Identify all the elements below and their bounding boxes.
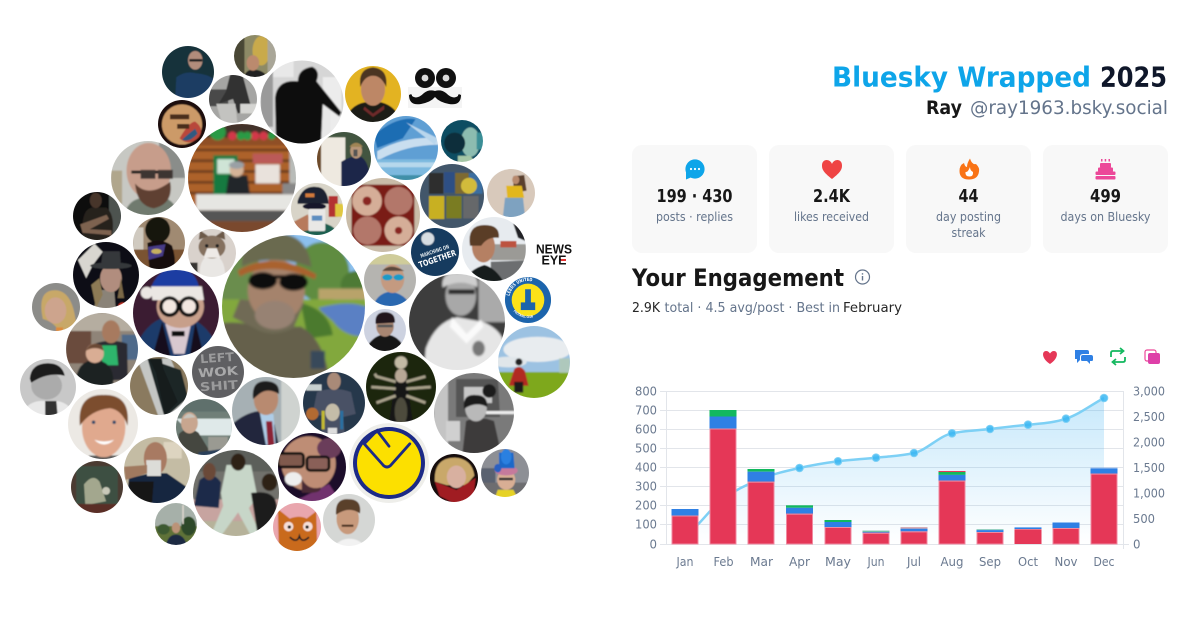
title: 2025 bbox=[1100, 60, 1167, 94]
avatar: blue sky bbox=[374, 116, 438, 180]
right axis: 500 bbox=[1133, 512, 1155, 526]
engagement summary bbox=[632, 300, 902, 316]
bar: Oct bbox=[1014, 527, 1042, 544]
avatar: woman in yellow top bbox=[487, 169, 535, 217]
avatar: small man in beanie bbox=[360, 305, 410, 355]
bar: Feb bbox=[710, 410, 736, 544]
avatar: main selfie with cap and sunglasses bbox=[222, 235, 365, 378]
month labels: Sep bbox=[979, 555, 1001, 569]
month labels bbox=[676, 555, 1114, 569]
avatar: lego log cabin bbox=[188, 124, 296, 232]
month labels: Mar bbox=[750, 555, 773, 569]
icon: replies bbox=[1075, 350, 1093, 364]
month labels: Apr bbox=[789, 555, 810, 569]
stacked bars bbox=[672, 410, 1118, 544]
avatar: tattooed man in dark bbox=[73, 192, 121, 240]
logo: News Eye: EYE bbox=[542, 254, 566, 268]
left axis: 700 bbox=[635, 404, 657, 418]
stat card: days on Bluesky: 499 bbox=[1090, 186, 1121, 207]
avatar: teal portrait bbox=[441, 120, 483, 162]
avatar: Marching On Together: MARCHING ON bbox=[420, 244, 450, 260]
avatar: Leeds United badge bbox=[504, 277, 551, 323]
avatar: smiling man bbox=[68, 389, 138, 459]
avatar cluster bbox=[20, 35, 572, 551]
avatar: man drinking from mug bbox=[124, 437, 190, 503]
avatar: tabby cat bbox=[188, 229, 236, 277]
right axis bbox=[1133, 384, 1165, 552]
avatar: zine posters bbox=[420, 164, 484, 228]
left axis: 300 bbox=[635, 480, 657, 494]
avatar: woman in red scarf bbox=[425, 449, 483, 507]
stat card: posts and replies: posts · replies bbox=[656, 210, 733, 224]
month labels: Jul bbox=[906, 555, 921, 569]
right axis: 3,000 bbox=[1133, 384, 1165, 398]
avatar: suit and tie bbox=[130, 357, 188, 415]
month labels: Jun bbox=[867, 555, 884, 569]
icon: likes bbox=[1043, 351, 1057, 364]
avatar: Left Wok Shit shirt bbox=[192, 346, 244, 398]
avatar: Left Wok Shit shirt: SHIT bbox=[200, 378, 239, 394]
stat card: day posting streak: 44 bbox=[958, 186, 978, 207]
stat card: day posting streak: streak bbox=[952, 226, 986, 240]
avatar: man with glasses, purple light bbox=[278, 433, 346, 501]
user name and handle: Ray bbox=[926, 97, 963, 119]
month labels: May bbox=[825, 555, 851, 569]
engagement summary: total · 4.5 avg/post · Best in bbox=[664, 300, 840, 316]
avatar: black silhouette at door bbox=[260, 60, 344, 144]
avatar: man in suit bbox=[232, 377, 300, 445]
bar: May bbox=[824, 520, 852, 544]
bar: Apr bbox=[786, 505, 813, 544]
right axis: 2,000 bbox=[1133, 436, 1165, 450]
avatar: records and moustache bbox=[408, 68, 462, 108]
left axis: 200 bbox=[635, 498, 657, 512]
avatar: santa hat and glasses bbox=[133, 270, 219, 356]
engagement summary: 2.9K bbox=[632, 300, 661, 316]
bar: Nov bbox=[1052, 522, 1080, 544]
avatar: runner with child bbox=[66, 313, 138, 385]
bar: Dec bbox=[1090, 468, 1118, 544]
avatar: red linocut print bbox=[346, 178, 420, 252]
avatar: Leeds United badge: LEEDS UNITED bbox=[506, 278, 532, 296]
cumulative area and line bbox=[685, 394, 1108, 544]
stat card: day posting streak bbox=[906, 145, 1031, 253]
avatar: cartoon orange cat bbox=[273, 503, 321, 551]
avatar: many-armed goddess bbox=[359, 345, 443, 429]
avatar: man in navy jacket bbox=[162, 46, 214, 98]
avatar: Leeds smiley badge bbox=[349, 423, 429, 503]
avatar: man with mug and cap bbox=[291, 183, 343, 235]
user name and handle: @ray1963.bsky.social bbox=[970, 97, 1168, 119]
stat card: days on Bluesky bbox=[1043, 145, 1168, 253]
stat card: day posting streak: day posting bbox=[936, 210, 1001, 224]
chart: engagement per month bbox=[635, 384, 1165, 569]
avatar: man in car bbox=[462, 217, 526, 281]
avatar: Marching On Together bbox=[411, 228, 459, 276]
stat card: likes received: 2.4K bbox=[813, 186, 851, 207]
month labels: Jan bbox=[676, 555, 694, 569]
avatar: man with trophy bbox=[297, 366, 371, 440]
avatar: man with Klimt painting bbox=[234, 35, 276, 77]
logo: News Eye bbox=[536, 242, 572, 268]
avatar: Left Wok Shit shirt: LEFT bbox=[200, 350, 235, 366]
avatar: album cover bbox=[71, 461, 123, 513]
avatar: bald man with glasses bbox=[111, 141, 185, 215]
bar: Aug bbox=[938, 471, 966, 544]
month labels: Nov bbox=[1054, 555, 1078, 569]
left axis: 400 bbox=[635, 460, 657, 474]
icon: cake bbox=[1096, 159, 1116, 180]
icon: heart bbox=[822, 160, 842, 179]
right axis: 0 bbox=[1133, 538, 1140, 552]
left axis: 500 bbox=[635, 442, 657, 456]
right axis: 1,000 bbox=[1133, 486, 1165, 500]
month labels: Feb bbox=[714, 555, 734, 569]
icon: reposts bbox=[1111, 348, 1125, 365]
avatar: black and white man in cap bbox=[20, 359, 76, 415]
avatar: man on yellow bbox=[345, 66, 401, 122]
avatar: black and white photo bbox=[209, 75, 257, 123]
left axis: 100 bbox=[635, 518, 657, 532]
avatar: man in hat bbox=[73, 242, 139, 308]
bar: Sep bbox=[976, 529, 1004, 544]
avatar: Marching On Together: TOGETHER bbox=[417, 247, 458, 270]
avatar: blonde woman bbox=[32, 283, 80, 331]
month labels: Dec bbox=[1094, 555, 1114, 569]
logo: News Eye: NEWS bbox=[536, 242, 572, 256]
avatar: man in blue sunglasses bbox=[359, 249, 421, 311]
stat card: days on Bluesky: days on Bluesky bbox=[1060, 210, 1150, 224]
bar: Jul bbox=[900, 527, 928, 544]
stat card: likes received: likes received bbox=[794, 210, 869, 224]
icon: speech bubble bbox=[685, 159, 705, 180]
avatar: mirror selfie bbox=[317, 132, 371, 186]
avatar: vinyl record label bbox=[158, 100, 206, 148]
month labels: Aug bbox=[940, 555, 964, 569]
bar: Jun bbox=[862, 531, 890, 544]
avatar: Dalek and Doctor bbox=[426, 365, 522, 461]
avatar: Left Wok Shit shirt: WOK bbox=[198, 364, 239, 380]
left axis: 800 bbox=[635, 384, 657, 398]
left axis bbox=[635, 384, 657, 552]
left axis: 600 bbox=[635, 422, 657, 436]
stat card: posts and replies: 199 · 430 bbox=[656, 186, 732, 207]
month labels: Oct bbox=[1018, 555, 1038, 569]
icon: flame bbox=[960, 158, 979, 180]
avatar: Leeds United badge: FOOTBALL CLUB bbox=[514, 310, 533, 318]
avatar: football action photo bbox=[193, 450, 279, 536]
avatar: black and white footballer bbox=[399, 264, 515, 380]
title: Bluesky Wrapped bbox=[832, 60, 1091, 94]
left axis: 0 bbox=[650, 538, 657, 552]
avatar: black dog bbox=[133, 217, 185, 269]
avatar: football commentator bbox=[176, 399, 232, 455]
icon: info bbox=[856, 270, 870, 284]
icon: quotes bbox=[1145, 350, 1160, 364]
right axis: 1,500 bbox=[1133, 461, 1165, 475]
bar: Mar bbox=[748, 469, 774, 544]
engagement summary: February bbox=[843, 300, 902, 316]
stat card: posts and replies bbox=[632, 145, 757, 253]
stat card: likes received bbox=[769, 145, 894, 253]
avatar: green field and sky bbox=[491, 319, 577, 405]
bar: Jan bbox=[672, 509, 698, 544]
avatar: man with moustache bbox=[323, 494, 375, 546]
right axis: 2,500 bbox=[1133, 410, 1165, 424]
avatar: fan with blue horn hat bbox=[476, 444, 534, 502]
heading: Your Engagement: Your Engagement bbox=[631, 264, 844, 292]
legend icons bbox=[1043, 348, 1160, 365]
avatar: man in field bbox=[155, 503, 197, 545]
